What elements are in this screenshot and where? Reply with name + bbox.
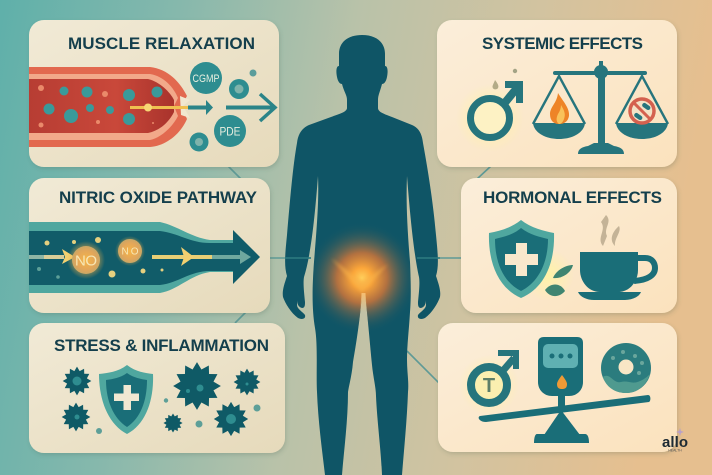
icon: donut xyxy=(601,343,651,393)
no-pills sign xyxy=(630,99,654,123)
icon: testosterone symbol: T xyxy=(483,375,495,397)
arm overlay lines xyxy=(285,257,440,259)
pathway tube arrow xyxy=(29,222,260,293)
logo: allo health: allo xyxy=(662,434,688,451)
steam xyxy=(601,215,609,246)
icon: balance scale xyxy=(533,61,668,154)
connector lines xyxy=(228,166,491,383)
icon: seesaw xyxy=(479,395,650,443)
heading: systemic effects: SYSTEMIC EFFECTS xyxy=(482,34,643,53)
panel: nitric oxide pathway xyxy=(29,178,270,313)
heading: stress and inflammation: STRESS & INFLAMMATION xyxy=(54,336,269,355)
icon: glucose meter xyxy=(538,337,583,396)
cGMP molecule: CGMP xyxy=(192,73,220,85)
panel: hormonal effects xyxy=(461,178,677,313)
logo: allo health: HEALTH xyxy=(668,448,682,452)
flame xyxy=(550,93,569,124)
icon: male symbol xyxy=(456,69,524,152)
NO molecule 2: NO xyxy=(122,246,139,258)
panel: metabolic balance xyxy=(438,323,677,452)
floating particles xyxy=(96,398,260,434)
shield with cross xyxy=(489,220,574,301)
small molecules xyxy=(190,70,256,152)
blood vessel xyxy=(29,67,190,147)
body silhouette xyxy=(282,35,440,475)
shield with cross xyxy=(99,365,153,434)
cGMP molecule xyxy=(190,62,222,94)
glow between legs xyxy=(360,293,367,312)
heading: hormonal effects: HORMONAL EFFECTS xyxy=(483,188,662,207)
NO molecule 1 xyxy=(67,241,105,279)
inflammation cells xyxy=(62,362,260,436)
NO molecule 1: NO xyxy=(75,252,97,270)
pelvic glow xyxy=(313,229,410,327)
heading: nitric oxide pathway: NITRIC OXIDE PATHWAY xyxy=(59,188,258,207)
icon: testosterone symbol xyxy=(459,350,519,415)
panel: stress and inflammation xyxy=(29,323,285,453)
logo: allo health xyxy=(662,428,688,452)
PDE molecule xyxy=(214,115,246,147)
arrows xyxy=(188,100,274,115)
panel: muscle relaxation xyxy=(29,20,279,167)
panel: systemic effects xyxy=(437,20,677,167)
NO molecule 2 xyxy=(115,236,145,266)
heading: muscle relaxation: MUSCLE RELAXATION xyxy=(68,34,255,53)
PDE molecule: PDE xyxy=(220,124,240,138)
coffee cup xyxy=(578,215,655,300)
leaves xyxy=(545,265,573,296)
